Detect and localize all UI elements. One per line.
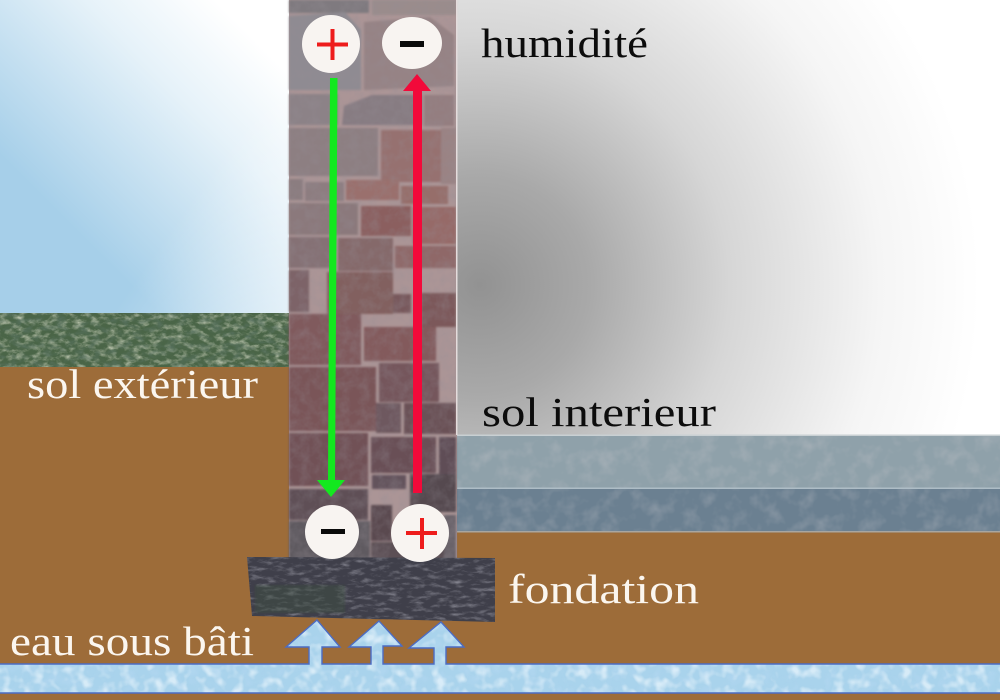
panel: foundation [247, 557, 495, 623]
panel: interior concrete floor [457, 434, 1000, 532]
panel: grass [0, 313, 289, 367]
icon: plus top [302, 15, 360, 73]
panel: soil [0, 367, 1000, 700]
label: humidité: humidité [481, 20, 648, 66]
icon: minus top [382, 17, 442, 69]
icon: plus bottom [391, 504, 449, 562]
icon: minus bottom [305, 505, 359, 559]
label: fondation: fondation [508, 566, 699, 612]
panel: outdoor sky [0, 0, 289, 313]
arrow: green descending [317, 78, 345, 497]
label: sol extérieur: sol extérieur [27, 361, 258, 407]
label: sol interieur: sol interieur [482, 389, 716, 435]
panel: groundwater band and rising arrows [0, 618, 1000, 694]
panel: stone wall [289, 0, 458, 572]
arrow: red rising [403, 74, 431, 493]
panel: interior room [457, 0, 1000, 435]
label: eau sous bâti: eau sous bâti [10, 618, 254, 664]
